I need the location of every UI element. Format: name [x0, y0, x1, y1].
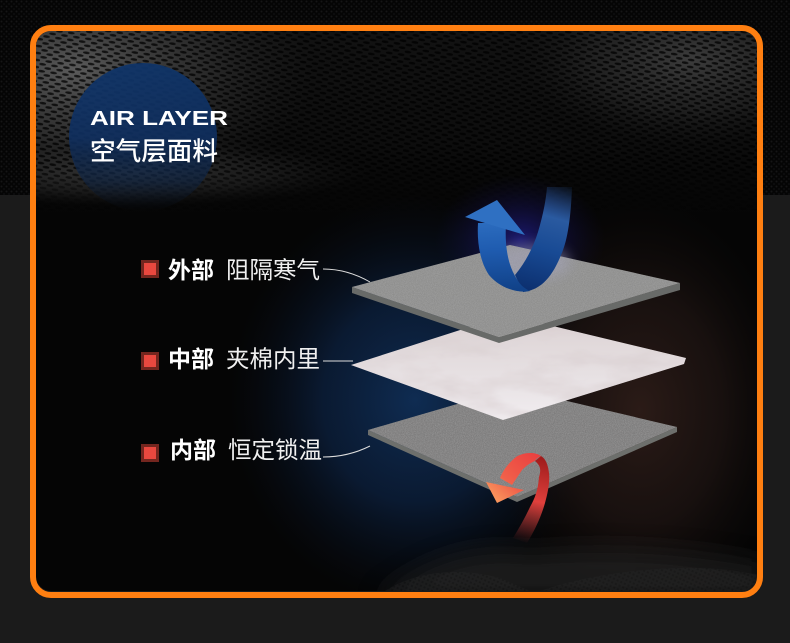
label: inner layer: 恒定锁温 — [228, 431, 322, 465]
blue circle — [69, 63, 217, 211]
arrow: red warm air retained — [486, 453, 549, 543]
label: inner layer: 内部 — [170, 431, 216, 465]
label: outer layer: 阻隔寒气 — [226, 251, 320, 285]
label: middle layer — [141, 340, 353, 374]
title: Chinese: 空气层面料 — [90, 131, 218, 168]
panel background artwork — [36, 31, 757, 591]
label: outer layer — [141, 251, 370, 285]
arrow: blue cold air deflected — [465, 187, 572, 292]
title: AIR LAYER: AIR LAYER — [90, 108, 229, 130]
label: middle layer: 中部 — [168, 340, 214, 374]
layer: top grey fabric — [352, 244, 680, 343]
layer: bottom grey fabric — [368, 388, 677, 502]
heading badge — [69, 63, 229, 211]
label: inner layer — [141, 431, 370, 465]
layer: middle cotton — [351, 315, 686, 420]
label: outer layer: 外部 — [168, 251, 214, 285]
label: middle layer: 夹棉内里 — [226, 340, 320, 374]
